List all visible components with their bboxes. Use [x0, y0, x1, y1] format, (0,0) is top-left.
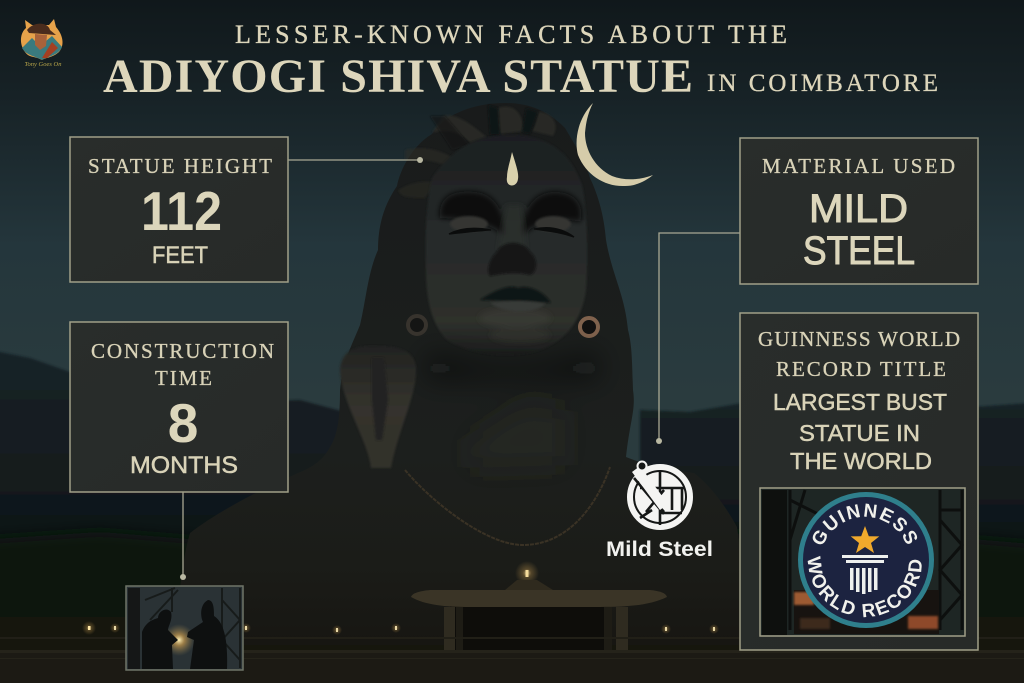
record label: GUINNESS WORLD [758, 327, 960, 351]
statue: lips [480, 287, 551, 311]
logo: script name: Tony Goes On [25, 61, 61, 68]
statue: nose [488, 243, 536, 276]
statue height unit: FEET [152, 242, 208, 269]
construction value: 8 [168, 392, 198, 454]
workers silhouettes [142, 600, 227, 669]
statue: neck shading [425, 352, 600, 468]
material value line one: MILD [809, 187, 908, 231]
construction label: CONSTRUCTION [91, 339, 274, 363]
badge: bottom arc text: WORLD RECORD [808, 556, 922, 618]
record label second line: RECORD TITLE [776, 357, 946, 381]
record value line two: STATUE IN [799, 420, 920, 446]
mild steel caption: Mild Steel [606, 538, 713, 561]
statue: hair locks [398, 107, 556, 198]
pavilion: steps [0, 637, 1024, 659]
panel: material used [740, 138, 978, 284]
statue: face [426, 135, 587, 355]
pavilion: glowing finial [505, 561, 553, 590]
pavilion at statue base [0, 561, 1024, 659]
title: first line: LESSER-KNOWN FACTS ABOUT THE [235, 20, 787, 49]
statue: eyes [449, 216, 574, 237]
badge: star [851, 526, 879, 553]
guinness world record badge [798, 492, 934, 628]
background: dark treeline and ground [0, 530, 1024, 683]
title: main statue name: ADIYOGI SHIVA STATUE [103, 50, 693, 103]
material label: MATERIAL USED [762, 154, 955, 178]
statue: cobra hood [340, 346, 416, 468]
panel: guinness world record [739, 312, 979, 651]
panel: statue height [70, 137, 288, 282]
construction label second line: TIME [155, 366, 212, 390]
connector: construction time [180, 492, 186, 580]
ground lamps [82, 621, 719, 635]
crescent moon [577, 103, 653, 186]
mild steel icon [606, 462, 713, 561]
photo: scaffolding behind badge [760, 488, 965, 636]
pavilion: roof [411, 590, 667, 607]
panel: construction time [70, 322, 288, 492]
pavilion: interior [450, 606, 610, 652]
badge: top arc text: GUINNESS [812, 504, 918, 544]
logo: traveller badge [21, 19, 63, 68]
statue height value: 112 [141, 180, 222, 242]
statue of Adiyogi Shiva [176, 103, 745, 645]
record value line one: LARGEST BUST [773, 389, 947, 415]
record value line three: THE WORLD [790, 448, 932, 474]
statue: golden tilak [507, 152, 518, 186]
badge: column [842, 555, 888, 594]
connector: material used [656, 233, 740, 444]
statue: rudraksha necklace [405, 467, 610, 545]
statue: earrings [408, 316, 598, 336]
photo: workers welding [126, 586, 243, 670]
pavilion: pillars [444, 607, 628, 650]
title [103, 20, 938, 103]
statue: face shading [440, 192, 581, 343]
background: mountains [0, 348, 1024, 580]
material value line two: STEEL [803, 229, 915, 273]
construction unit: MONTHS [130, 452, 238, 479]
statue: hair, neck and shoulders silhouette [176, 103, 745, 645]
connector: statue height [288, 157, 423, 163]
statue height label: STATUE HEIGHT [88, 154, 272, 178]
title: location: IN COIMBATORE [707, 70, 938, 97]
